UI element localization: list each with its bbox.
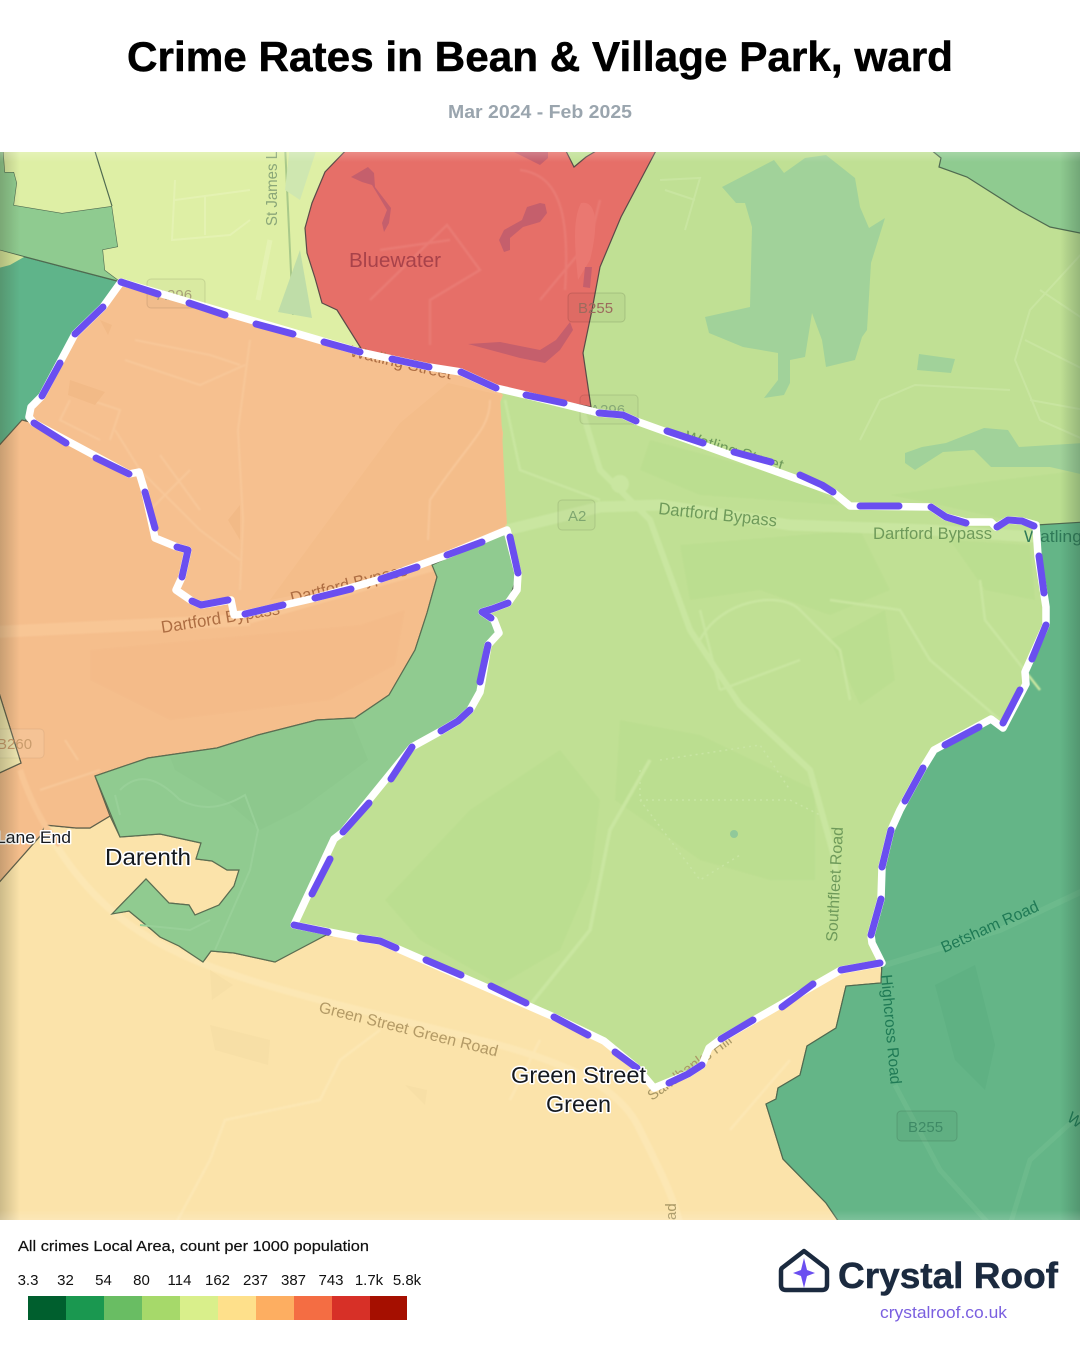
legend value labels: 54 xyxy=(95,1272,112,1289)
legend value labels: 1.7k xyxy=(355,1272,384,1289)
road shield: B255 south xyxy=(897,1111,957,1141)
choropleth map xyxy=(0,152,1080,1220)
road shield: A2 xyxy=(558,500,595,530)
road label: Watling Street west: Watling Street xyxy=(348,343,454,383)
area: ward boundary lines north-west xyxy=(93,145,112,206)
ward area: main light green background xyxy=(0,152,1080,1220)
area: lower orange ward xyxy=(0,420,437,887)
road label: Watling: Watling xyxy=(1024,527,1080,546)
road label: partial road south: ad xyxy=(663,1203,680,1220)
road label: Green Street Green Road: Green Street Green Road xyxy=(317,999,500,1060)
selected ward boundary: white casing xyxy=(29,282,1046,1088)
legend value labels: 743 xyxy=(318,1272,344,1289)
area: yellow southern ward xyxy=(0,816,882,1225)
road shield: A296 west xyxy=(147,279,205,308)
road label: Sandbanks Hill: Sandbanks Hill xyxy=(644,1032,735,1104)
road label: Southfleet Road: Southfleet Road xyxy=(824,826,847,942)
legend value labels: 80 xyxy=(133,1272,150,1289)
road shield: B255 north xyxy=(568,293,625,322)
road label: B255 south: B255 xyxy=(908,1119,943,1136)
legend value labels: 3.3 xyxy=(18,1272,38,1289)
icon: pond xyxy=(730,830,738,838)
area: darker green patches inside ward xyxy=(385,440,1080,985)
area: lower orange roads and fields xyxy=(0,568,432,845)
selected ward boundary: purple dashes xyxy=(34,282,1046,1083)
place label: Green Street Green: Green xyxy=(546,1091,611,1117)
road label: Dartford Bypass upper: Dartford Bypass xyxy=(288,560,409,608)
area: eastern ward details xyxy=(885,890,1080,1225)
legend value labels: 32 xyxy=(57,1272,74,1289)
road shield: B260 xyxy=(0,729,44,758)
place label: Darenth: Darenth xyxy=(105,844,191,870)
logo: Crystal Roof xyxy=(778,1248,1059,1322)
road label: Betsham Road: Betsham Road xyxy=(939,898,1042,957)
area: darker field inside upper orange ward xyxy=(270,383,507,600)
road label: Dartford Bypass lower: Dartford Bypass xyxy=(160,599,281,637)
area: Bluewater dark lakes xyxy=(351,145,592,363)
area: dark green eastern ward xyxy=(766,522,1080,1225)
legend value labels: 387 xyxy=(281,1272,306,1289)
legend xyxy=(18,1238,422,1320)
area: north-west yellow-green xyxy=(3,145,362,350)
road label: A296 west: A296 xyxy=(157,287,192,304)
legend value labels xyxy=(18,1272,422,1289)
area: top-left dark green xyxy=(0,249,121,450)
area: footpath dots in park xyxy=(640,745,820,880)
area: top-right medium green xyxy=(925,145,1080,234)
area: top-left pale sliver xyxy=(0,249,24,269)
area: Green Street Green roads xyxy=(20,770,790,1225)
logo url: crystalroof.co.uk xyxy=(880,1303,1008,1322)
area: medium green ward at centre-left xyxy=(95,530,518,962)
area: north-east residential streets xyxy=(660,178,1080,440)
logo wordmark: Crystal Roof xyxy=(838,1255,1059,1296)
map edge vignette xyxy=(0,152,1080,1220)
legend value labels: 5.8k xyxy=(393,1272,422,1289)
area: upper orange ward xyxy=(29,282,507,615)
road label: A296 centre: A296 xyxy=(590,402,625,419)
area: top-left medium green xyxy=(0,145,121,282)
legend colour scale xyxy=(28,1296,407,1320)
area: lake shapes in north-east xyxy=(705,155,1080,475)
icon: house with star xyxy=(781,1251,827,1290)
area: small pale pocket at left edge xyxy=(0,680,21,775)
area: Bluewater interior lighter roads xyxy=(370,170,600,345)
place label: Green Street Green xyxy=(511,1062,647,1117)
legend value labels: 114 xyxy=(168,1272,191,1289)
area: southern ward darker fields xyxy=(210,970,427,1105)
area: north-west streets and canal xyxy=(172,145,318,318)
subtitle: date range: Mar 2024 - Feb 2025 xyxy=(448,102,632,122)
label: Bluewater: Bluewater xyxy=(349,250,441,272)
road shield: A296 centre xyxy=(580,395,638,424)
road label: Dartford Bypass centre: Dartford Bypass xyxy=(658,499,778,530)
area: darker blocks in upper orange ward xyxy=(68,320,240,540)
road label: Dartford Bypass east: Dartford Bypass xyxy=(873,524,992,543)
area: A2 and local roads in main ward xyxy=(505,400,1040,1005)
area: Bluewater red ward xyxy=(305,145,659,407)
legend title: All crimes Local Area, count per 1000 population xyxy=(18,1238,369,1255)
area: Bluewater lighter stripe xyxy=(575,203,595,280)
road label: Highcross Road: Highcross Road xyxy=(877,974,904,1085)
road label: A2: A2 xyxy=(568,508,586,525)
road label: Watling Street east: Watling Street xyxy=(683,429,786,475)
area: residential streets inside upper orange ward xyxy=(60,340,490,590)
legend value labels: 237 xyxy=(243,1272,268,1289)
title: Crime Rates in Bean & Village Park, ward xyxy=(127,33,953,80)
road label: B255 north: B255 xyxy=(578,300,613,317)
legend value labels: 162 xyxy=(205,1272,230,1289)
place label: Green Street Green: Green Street xyxy=(511,1062,647,1088)
area: centre-left ward details xyxy=(115,720,368,950)
